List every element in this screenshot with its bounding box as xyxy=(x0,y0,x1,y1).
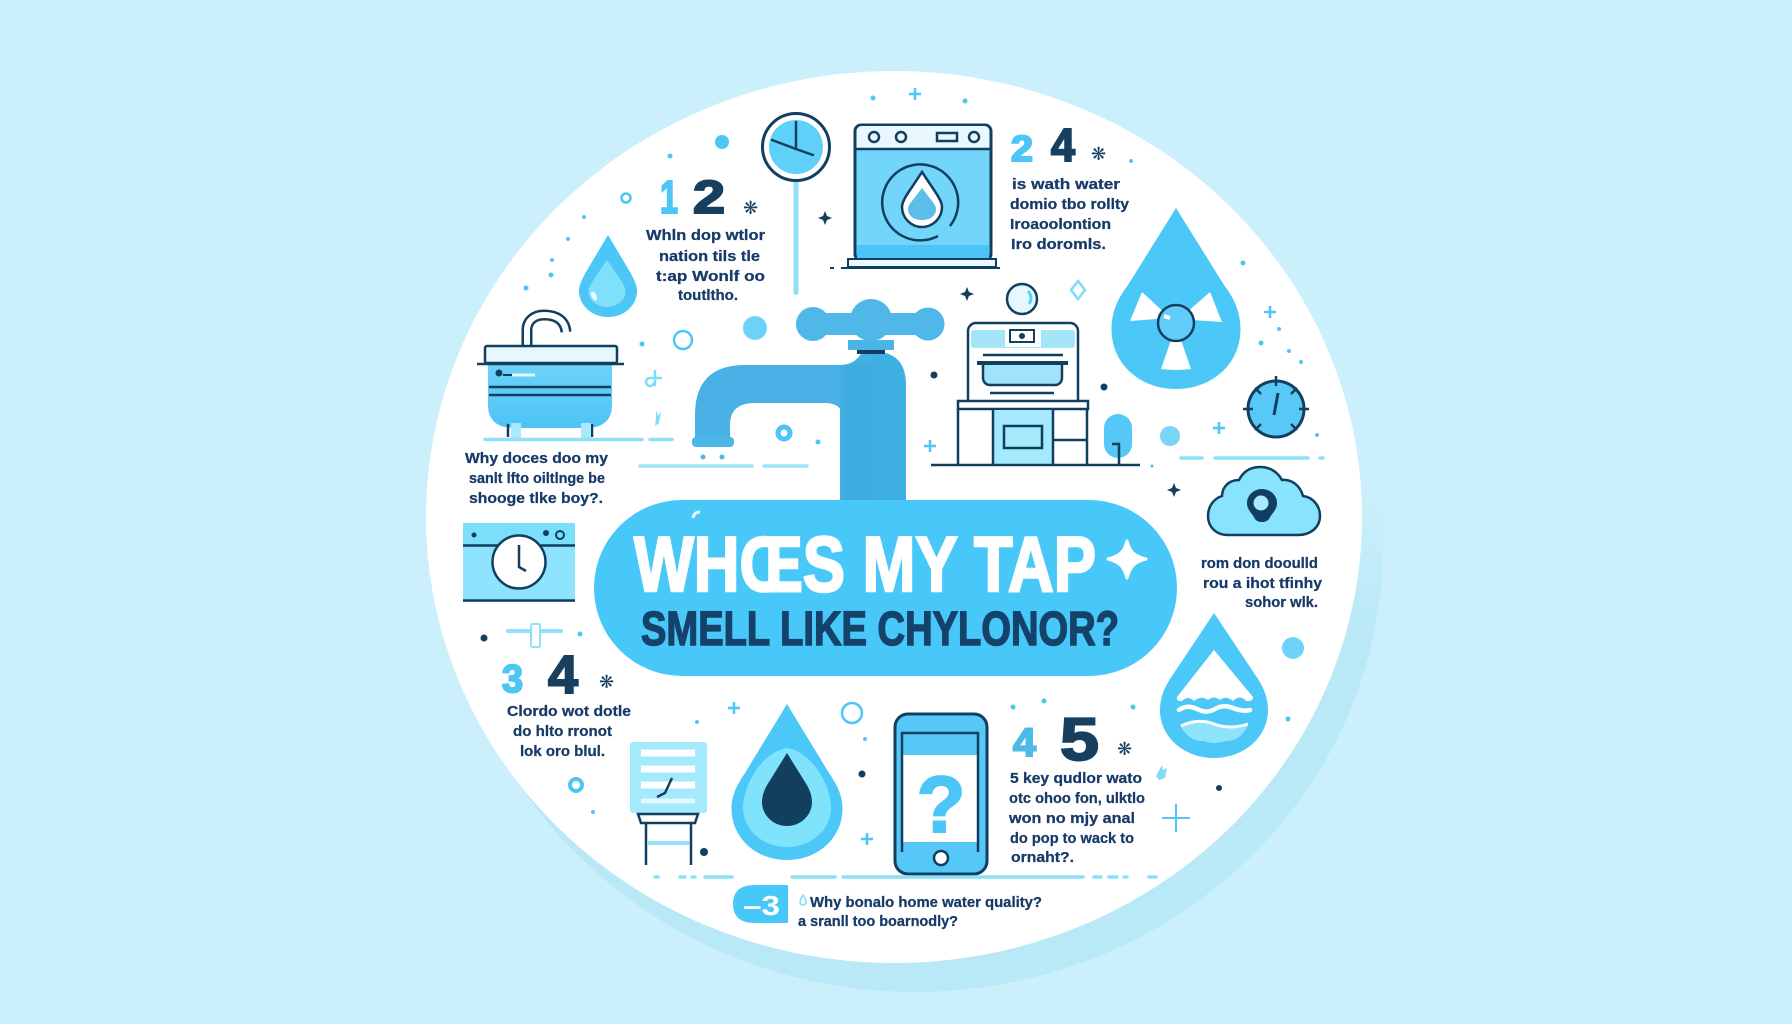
icon: washing machine with drop xyxy=(830,125,1000,268)
badge: –3 xyxy=(743,890,780,921)
icon: cloud with pin xyxy=(1208,467,1320,535)
section: item 4 5 xyxy=(1008,706,1145,866)
icon: small valve xyxy=(506,624,563,647)
number pair: 2 xyxy=(693,171,725,223)
number pair: ❋ xyxy=(599,672,614,693)
icon: phone with question mark xyxy=(895,714,987,874)
title banner xyxy=(594,500,1177,676)
question text: won no mjy anal xyxy=(1008,811,1135,827)
icon: water drop small xyxy=(579,235,637,317)
question text: Iroaoolontion xyxy=(1010,217,1111,233)
question text: Iro doromls. xyxy=(1011,237,1106,253)
divider: right dashes xyxy=(1181,456,1323,460)
number pair xyxy=(502,645,614,705)
divider: bottom dashes xyxy=(655,875,1156,879)
question text: otc ohoo fon, ulktlo xyxy=(1009,791,1145,807)
question text xyxy=(1008,771,1145,866)
icon: clock on stem xyxy=(762,114,830,295)
text: bath question: shooge tlke boy?. xyxy=(469,491,603,507)
number pair: ❋ xyxy=(743,198,758,219)
question text: lok oro blul. xyxy=(520,744,605,760)
text: cloud question: sohor wlk. xyxy=(1245,595,1318,611)
text: bath question xyxy=(465,451,608,507)
number pair: 4 xyxy=(1051,119,1075,171)
text: cloud question: rom don dooulld xyxy=(1201,556,1318,572)
question text: 5 key qudlor wato xyxy=(1010,771,1142,787)
title line one: WHŒS MY TAP xyxy=(634,520,1096,608)
icon: tiny drop xyxy=(800,895,806,905)
icon: drop with waves xyxy=(1160,613,1268,758)
decorative dots and sparkles xyxy=(480,88,1319,856)
number pair: 4 xyxy=(548,645,578,705)
number pair: 5 xyxy=(1060,706,1099,773)
number pair: 4 xyxy=(1013,721,1037,765)
question text: toutltho. xyxy=(678,288,738,304)
question text: Why bonalo home water quality? xyxy=(810,895,1042,911)
icon: filter crate on stand xyxy=(630,742,707,865)
number pair: ❋ xyxy=(1117,739,1132,760)
number pair: 2 xyxy=(1011,128,1033,169)
icon: sparkle xyxy=(1108,541,1146,578)
section: item 2 4 xyxy=(1010,119,1129,253)
question text: nation tils tle xyxy=(659,249,760,265)
icon: bathtub sink xyxy=(477,315,672,440)
question text: ornaht?. xyxy=(1011,850,1074,866)
number pair xyxy=(1013,706,1132,773)
circle shadow xyxy=(447,100,1383,992)
text: cloud question: rou a ihot tfinhy xyxy=(1203,576,1322,592)
text: bath question: sanlt lfto oiltlnge be xyxy=(469,471,605,487)
section: item 1 2 xyxy=(646,171,765,304)
icon: drop with dark centre xyxy=(732,704,842,860)
number pair: 1 xyxy=(660,171,678,223)
question text xyxy=(1010,177,1129,253)
question text: domio tbo rollty xyxy=(1010,197,1129,213)
section: item 3 4 xyxy=(502,645,631,760)
question text: is wath water xyxy=(1012,177,1120,193)
number pair xyxy=(660,171,758,223)
text: cloud question xyxy=(1201,556,1322,611)
question text: a sranll too boarnodly? xyxy=(798,914,958,930)
question text xyxy=(798,895,1042,930)
question text: t:ap Wonlf oo xyxy=(656,269,765,285)
illustration: central tap xyxy=(640,299,944,500)
question text: Whln dop wtlor xyxy=(646,228,765,244)
question text: Clordo wot dotle xyxy=(507,704,631,720)
icon: gauge xyxy=(1243,376,1309,437)
icon: phone with question mark: ? xyxy=(917,760,965,849)
section: bottom callout xyxy=(733,885,1042,930)
text: bath question: Why doces doo my xyxy=(465,451,608,467)
title line two: SMELL LIKE CHYLONOR? xyxy=(641,603,1119,656)
badge xyxy=(733,885,788,923)
question text: do pop to wack to xyxy=(1010,831,1134,847)
question text xyxy=(507,704,631,760)
number pair: 3 xyxy=(502,658,523,701)
icon: large drop with radiation symbol xyxy=(1112,208,1240,389)
number pair xyxy=(1011,119,1106,171)
question text xyxy=(646,228,765,304)
number pair: ❋ xyxy=(1091,144,1106,165)
question text: do hlto rronot xyxy=(513,724,612,740)
icon: clock panel xyxy=(463,523,575,602)
white circle panel xyxy=(426,71,1362,963)
icon: oven on counter xyxy=(931,284,1140,465)
